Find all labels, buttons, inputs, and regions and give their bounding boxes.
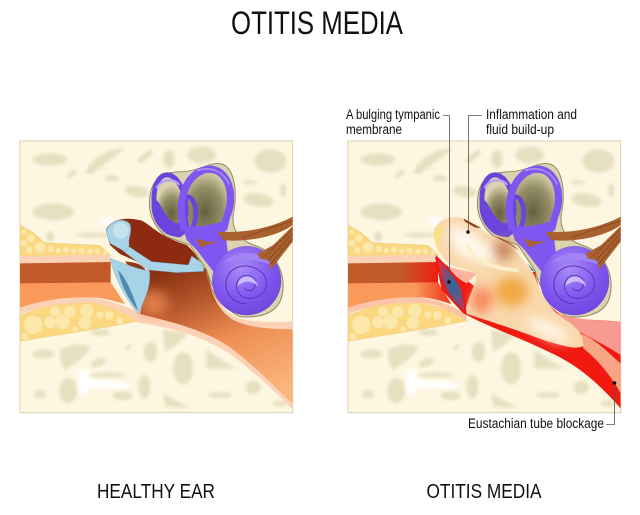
pale swollen lining xyxy=(556,312,620,355)
ear canal tissue layers xyxy=(20,225,142,341)
bulging tympanic membrane xyxy=(437,257,466,313)
middle ear cavity xyxy=(106,219,205,270)
callout: bulging tympanic membrane: membrane xyxy=(346,122,402,137)
eustachian tube xyxy=(138,267,293,409)
tympanic membrane xyxy=(110,258,150,314)
inflamed middle ear and tube xyxy=(433,217,621,408)
red mucosa xyxy=(435,257,621,408)
callout: inflammation and fluid build-up xyxy=(466,107,577,234)
caption: healthy ear: HEALTHY EAR xyxy=(97,481,215,503)
temporal bone background xyxy=(20,141,293,413)
callout: eustachian tube blockage xyxy=(468,381,616,431)
caption: otitis media: OTITIS MEDIA xyxy=(426,481,542,503)
callout: inflammation and fluid build-up: fluid build-up xyxy=(486,122,554,137)
inner ear xyxy=(149,164,293,317)
panel: otitis media xyxy=(348,141,621,413)
temporal bone background xyxy=(348,141,621,413)
fluid build-up xyxy=(433,217,583,348)
callout: bulging tympanic membrane: A bulging tympanic xyxy=(346,107,440,122)
callout: inflammation and fluid build-up: Inflammation and xyxy=(486,107,577,122)
inner ear xyxy=(477,164,621,317)
ossicles xyxy=(106,220,204,273)
callout: eustachian tube blockage: Eustachian tube blockage xyxy=(468,416,604,431)
ear canal tissue layers xyxy=(348,225,468,341)
callout: bulging tympanic membrane xyxy=(346,107,451,284)
panel: healthy ear xyxy=(20,141,293,413)
title: OTITIS MEDIA xyxy=(231,5,404,41)
